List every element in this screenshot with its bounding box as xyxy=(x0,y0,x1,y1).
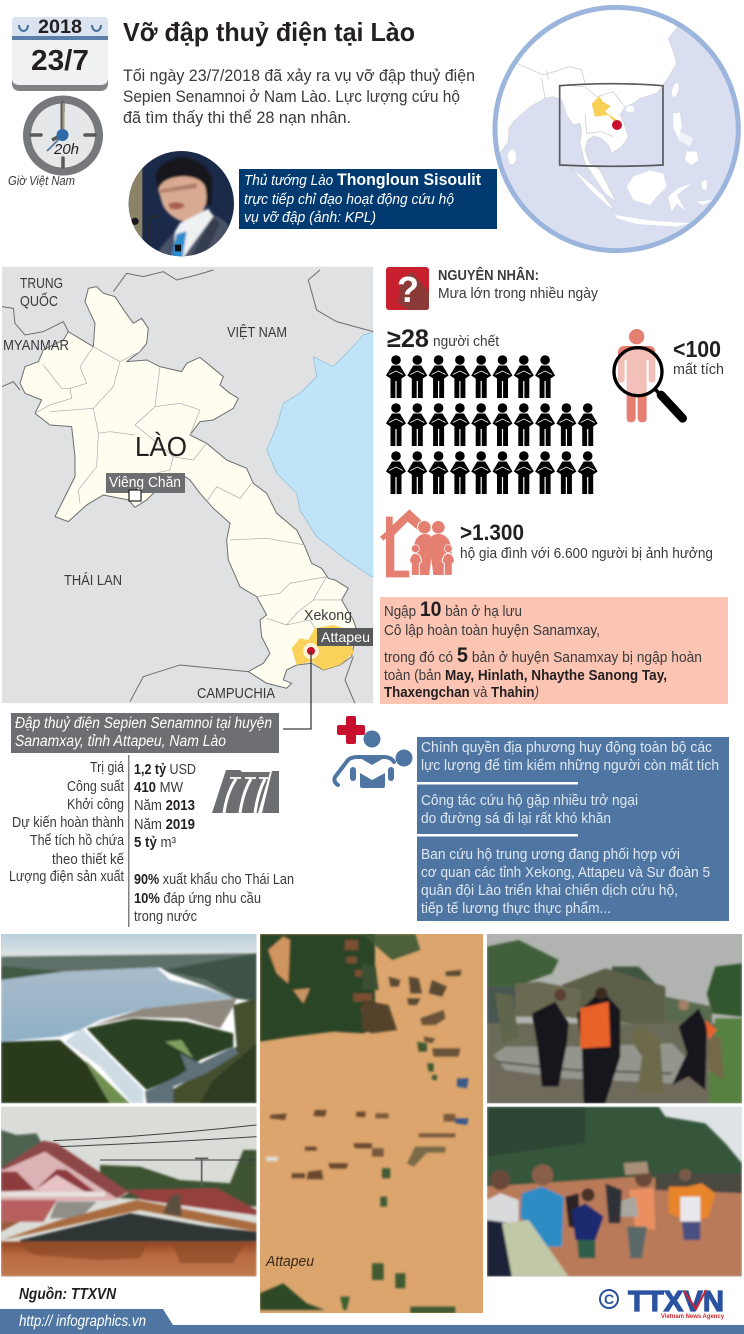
dam facts table: Lượng điện sản xuất xyxy=(9,869,124,885)
icon: house and family xyxy=(380,509,455,577)
photo: flooded house xyxy=(1,1107,257,1277)
caption: prime minister: trực tiếp chỉ đạo hoạt động cứu hộ xyxy=(244,192,454,208)
icon: dam xyxy=(212,770,279,813)
panel: rescue efforts: Chính quyền địa phương huy động toàn bộ các xyxy=(421,739,712,756)
TTXVN logo: Vietnam News Agency xyxy=(661,1313,724,1320)
photo label: Attapeu: Attapeu xyxy=(265,1254,314,1270)
Attapeu marker: Attapeu xyxy=(321,629,370,645)
deaths figure: ≥28 xyxy=(387,325,429,353)
connector to dam caption xyxy=(283,651,311,729)
map labels: THÁI LAN xyxy=(64,572,122,589)
icon: missing person under magnifier xyxy=(614,329,683,422)
missing figure: <100 xyxy=(673,336,721,362)
dam facts table: Trị giá xyxy=(90,760,125,776)
panel: flooding: Ngập 10 bản ở hạ lưu xyxy=(384,598,522,621)
map labels: Xekong xyxy=(304,607,352,624)
households figure: >1.300 xyxy=(460,520,524,545)
dam caption xyxy=(11,713,279,753)
deaths figure: người chết xyxy=(433,334,499,350)
Attapeu province xyxy=(292,625,353,670)
photo: villagers wading xyxy=(487,1107,742,1277)
TTXVN logo: C xyxy=(604,1291,614,1307)
intro text: Tối ngày 23/7/2018 đã xảy ra vụ vỡ đập thuỷ điện xyxy=(123,67,475,85)
cause text: Mưa lớn trong nhiều ngày xyxy=(438,286,599,302)
panel: flooding xyxy=(380,597,728,704)
map of Laos xyxy=(2,267,375,703)
Laos territory xyxy=(20,287,357,688)
clock icon: 20h xyxy=(53,142,79,158)
pictogram: 28 people xyxy=(386,355,598,494)
dam facts table: trong nước xyxy=(134,909,197,925)
neighbouring borders xyxy=(2,270,373,703)
dam facts table: Thể tích hồ chứa xyxy=(30,833,125,849)
missing figure xyxy=(673,336,724,378)
sea xyxy=(267,332,375,577)
map labels: CAMPUCHIA xyxy=(197,685,275,702)
map labels: VIỆT NAM xyxy=(227,324,287,341)
panel: rescue efforts: do đường sá đi lại rất khó khăn xyxy=(421,810,611,827)
source: Nguồn: TTXVN xyxy=(19,1286,116,1303)
map labels xyxy=(3,275,352,702)
panel: rescue efforts: Ban cứu hộ trung ương đang phối hợp với xyxy=(421,846,680,863)
panel: rescue efforts: quân đội Lào triển khai chiến dịch cứu hộ, xyxy=(421,882,678,899)
calendar icon xyxy=(12,17,108,91)
locator globe xyxy=(487,0,739,252)
icon: rescue xyxy=(334,716,412,788)
panel: flooding: toàn (bản May, Hinlath, Nhaythe Sanong Tay, xyxy=(384,668,667,684)
cause text: NGUYÊN NHÂN: xyxy=(438,266,539,284)
households figure: hộ gia đình với 6.600 người bị ảnh hưởng xyxy=(460,546,713,562)
map labels: LÀO xyxy=(135,431,187,462)
dam facts table: 90% xuất khẩu cho Thái Lan xyxy=(134,872,294,888)
footer bar: http:// infographics.vn xyxy=(19,1313,146,1330)
Vientiane marker: Viêng Chăn xyxy=(109,475,181,491)
map labels: TRUNG xyxy=(20,275,63,292)
province lines xyxy=(35,347,342,628)
map labels: QUỐC xyxy=(20,292,58,310)
panel: rescue efforts xyxy=(417,737,729,921)
dam facts table: Khởi công xyxy=(67,797,124,813)
caption: prime minister: vụ vỡ đập (ảnh: KPL) xyxy=(244,210,376,226)
dam caption: Sanamxay, tỉnh Attapeu, Nam Lào xyxy=(15,733,226,750)
panel: rescue efforts: lực lượng để tìm kiếm những người còn mất tích xyxy=(421,757,719,774)
Attapeu marker xyxy=(303,628,373,659)
TTXVN logo: TTXVN xyxy=(628,1286,724,1318)
panel: rescue efforts: Công tác cứu hộ gặp nhiều trở ngại xyxy=(421,792,638,809)
dam caption: Đập thuỷ điện Sepien Senamnoi tại huyện xyxy=(15,715,272,732)
photo: rescue team with boat xyxy=(487,934,742,1103)
dam facts table: 5 tỷ m³ xyxy=(134,835,176,851)
footer bar xyxy=(0,1309,744,1334)
photo: dam and reservoir xyxy=(1,934,257,1103)
dam facts table: 10% đáp ứng nhu cầu xyxy=(134,891,261,907)
cause text xyxy=(438,266,599,302)
clock caption: Giờ Việt Nam xyxy=(8,173,75,188)
clock icon xyxy=(23,96,103,176)
dam facts table: Năm 2013 xyxy=(134,798,195,814)
dam facts table: Công suất xyxy=(67,779,124,795)
map labels: MYANMAR xyxy=(3,337,69,354)
dam facts table xyxy=(9,755,294,927)
dam facts table: 410 MW xyxy=(134,780,183,796)
missing figure: mất tích xyxy=(673,362,724,378)
households figure xyxy=(460,520,713,562)
cause icon xyxy=(386,267,429,310)
title: Vỡ đập thuỷ điện tại Lào xyxy=(123,17,415,47)
cause icon: ? xyxy=(397,269,419,310)
photo: flooded Attapeu aerial view xyxy=(260,934,483,1313)
portrait photo xyxy=(128,151,234,256)
dam facts table: theo thiết kế xyxy=(52,852,124,868)
panel: rescue efforts: tiếp tế lương thực thực phẩm... xyxy=(421,900,611,917)
intro text xyxy=(123,67,475,127)
intro text: đã tìm thấy thi thể 28 nạn nhân. xyxy=(123,109,351,127)
panel: flooding: trong đó có 5 bản ở huyện Sanamxay bị ngập hoàn xyxy=(384,644,702,667)
intro text: Sepien Senamnoi ở Nam Lào. Lực lượng cứu hộ xyxy=(123,88,460,106)
dam facts table: Dự kiến hoàn thành xyxy=(12,815,124,831)
panel: flooding: Thaxengchan và Thahin) xyxy=(384,685,539,701)
Vientiane marker xyxy=(106,473,185,501)
caption: prime minister xyxy=(239,169,497,229)
calendar icon: 2018 xyxy=(38,17,82,38)
deaths figure xyxy=(387,325,499,353)
dam facts table: 1,2 tỷ USD xyxy=(134,762,196,778)
calendar icon: 23/7 xyxy=(31,45,89,77)
panel: flooding: Cô lập hoàn toàn huyện Sanamxay, xyxy=(384,623,600,639)
dam facts table: Năm 2019 xyxy=(134,817,195,833)
panel: rescue efforts: cơ quan các tỉnh Xekong, Attapeu và Sư đoàn 5 xyxy=(421,864,710,881)
caption: prime minister: Thủ tướng Lào Thongloun Sisoulit xyxy=(244,170,481,189)
